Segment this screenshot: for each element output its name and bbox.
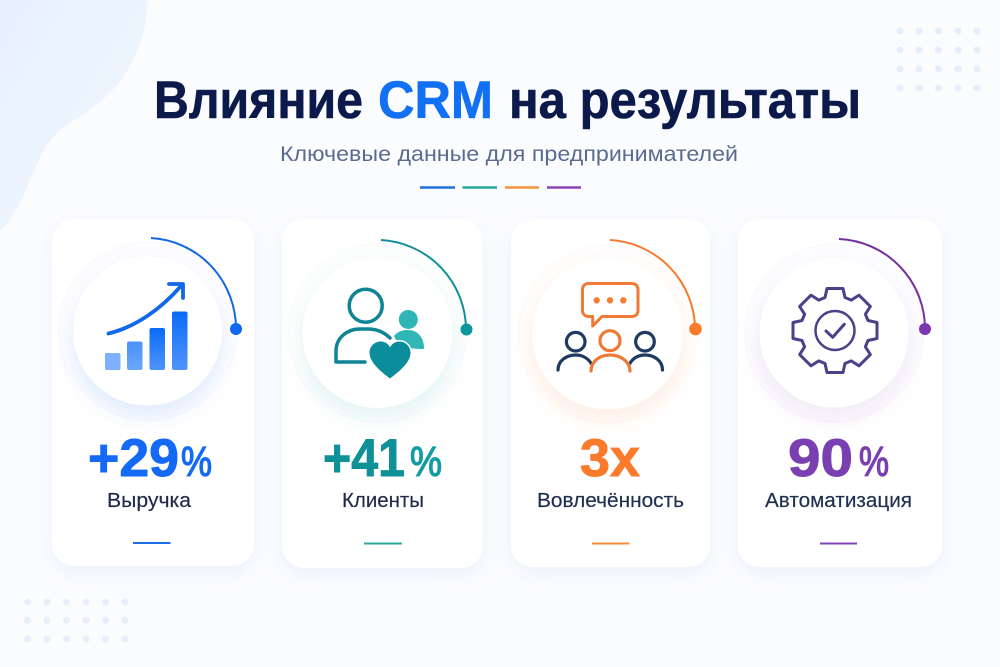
label: Автоматизация [765, 489, 912, 512]
value: % [181, 438, 212, 485]
accent line [133, 542, 170, 544]
progress dot [230, 323, 242, 335]
accent line [364, 542, 402, 544]
progress dot [460, 324, 472, 336]
gauge ring [518, 245, 696, 423]
accent line [820, 542, 857, 544]
gauge ring [58, 242, 236, 420]
label: Клиенты [342, 489, 424, 512]
label: Вовлечённость [537, 489, 684, 512]
icon: gear with check [793, 288, 877, 372]
icon: growth chart [105, 284, 188, 370]
title: CRM [378, 71, 493, 130]
value: +41 [323, 429, 405, 488]
panel: Вовлечённость [511, 219, 710, 567]
icon disc [73, 256, 222, 406]
progress arc [610, 240, 695, 329]
value: % [410, 438, 442, 485]
progress arc [839, 239, 925, 329]
icon: group conversation [558, 284, 662, 371]
gauge ring [288, 244, 466, 422]
icon: customer with heart [336, 289, 424, 378]
background blob [0, 0, 147, 231]
dot grid: bottom left [24, 598, 128, 642]
dot grid: top right [896, 28, 980, 92]
value: 90 [788, 429, 853, 488]
label: Выручка [107, 489, 192, 512]
progress arc [381, 240, 466, 329]
accent line [592, 542, 630, 544]
panel: Автоматизация [738, 219, 942, 567]
progress dot [919, 323, 931, 335]
panel: Выручка [52, 219, 254, 566]
icon disc [302, 258, 452, 408]
title: Влияние [154, 71, 363, 130]
progress arc [151, 238, 236, 329]
value: 3x [580, 429, 641, 488]
panel: Клиенты [282, 219, 483, 568]
value: % [859, 438, 889, 485]
icon disc [532, 258, 683, 410]
title accent dashes [420, 186, 581, 189]
icon disc [760, 258, 908, 408]
progress dot [689, 323, 702, 335]
value: +29 [88, 429, 179, 488]
gauge ring [745, 244, 923, 422]
subtitle: Ключевые данные для предпринимателей [280, 142, 738, 166]
title: на результаты [509, 71, 861, 130]
